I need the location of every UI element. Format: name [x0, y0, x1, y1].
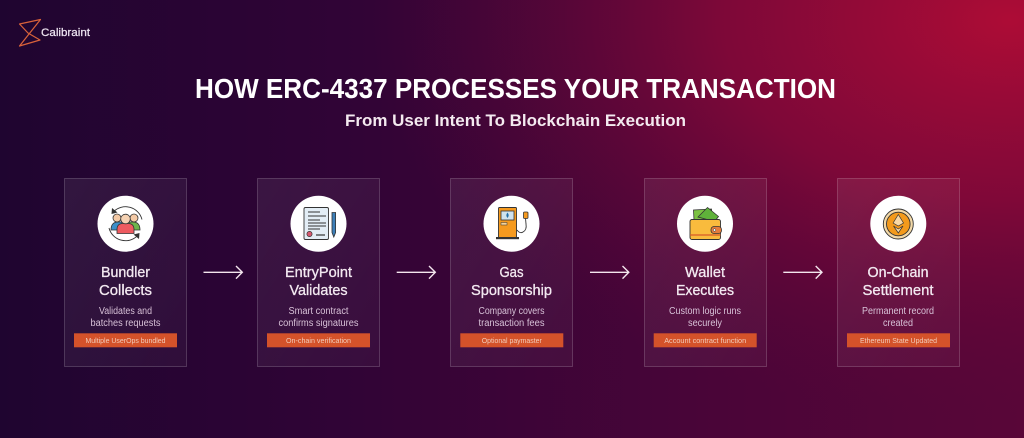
arrow [204, 266, 242, 279]
heading: Settlement [862, 283, 934, 299]
icon: ethereum coin [870, 196, 926, 252]
heading [862, 265, 934, 299]
heading: Wallet [685, 265, 725, 281]
description: securely [688, 318, 722, 329]
description [862, 306, 934, 329]
heading: EntryPoint [285, 265, 352, 281]
description [478, 306, 545, 329]
panel: On-Chain Settlement [838, 178, 960, 366]
badge: Account contract function [664, 336, 746, 345]
logo [20, 20, 90, 46]
heading: Bundler [101, 265, 150, 281]
description [278, 306, 359, 329]
badge [847, 333, 950, 347]
description: Company covers [478, 306, 545, 317]
icon: logo mark [20, 20, 40, 46]
description: Permanent record [862, 306, 934, 317]
arrow [397, 266, 435, 279]
badge [267, 333, 370, 347]
badge [74, 333, 177, 347]
title: HOW ERC-4337 PROCESSES YOUR TRANSACTION [195, 73, 836, 104]
heading: On-Chain [868, 265, 928, 281]
panel: Gas Sponsorship [450, 178, 572, 366]
description: Validates and [99, 306, 152, 317]
description: batches requests [90, 318, 161, 329]
badge: Multiple UserOps bundled [86, 336, 166, 345]
description: transaction fees [478, 318, 545, 329]
description: confirms signatures [278, 318, 359, 329]
icon: fuel pump [484, 196, 540, 252]
badge: On-chain verification [286, 336, 351, 345]
description [90, 306, 161, 329]
description: Smart contract [288, 306, 349, 317]
logo wordmark: Calibraint [41, 27, 90, 39]
badge [654, 333, 757, 347]
icon: group of users [98, 196, 154, 252]
heading [285, 265, 352, 299]
icon: contract and pen [290, 196, 346, 252]
panel: EntryPoint Validates [258, 178, 380, 366]
heading: Collects [99, 283, 152, 299]
heading [676, 265, 734, 299]
heading: Gas [500, 265, 524, 281]
badge: Ethereum State Updated [860, 336, 937, 345]
arrow [783, 266, 822, 279]
subtitle: From User Intent To Blockchain Execution [345, 111, 686, 130]
arrow [590, 266, 629, 279]
badge: Optional paymaster [482, 336, 542, 345]
heading [99, 265, 152, 299]
heading: Sponsorship [471, 283, 552, 299]
icon: wallet with cash [677, 196, 733, 252]
heading: Validates [290, 283, 348, 299]
description: Custom logic runs [669, 306, 741, 317]
description [669, 306, 741, 329]
heading: Executes [676, 283, 734, 299]
heading [471, 265, 552, 299]
badge [460, 333, 563, 347]
panel: Bundler Collects [64, 178, 186, 366]
description: created [883, 318, 913, 329]
panel: Wallet Executes [644, 178, 766, 366]
